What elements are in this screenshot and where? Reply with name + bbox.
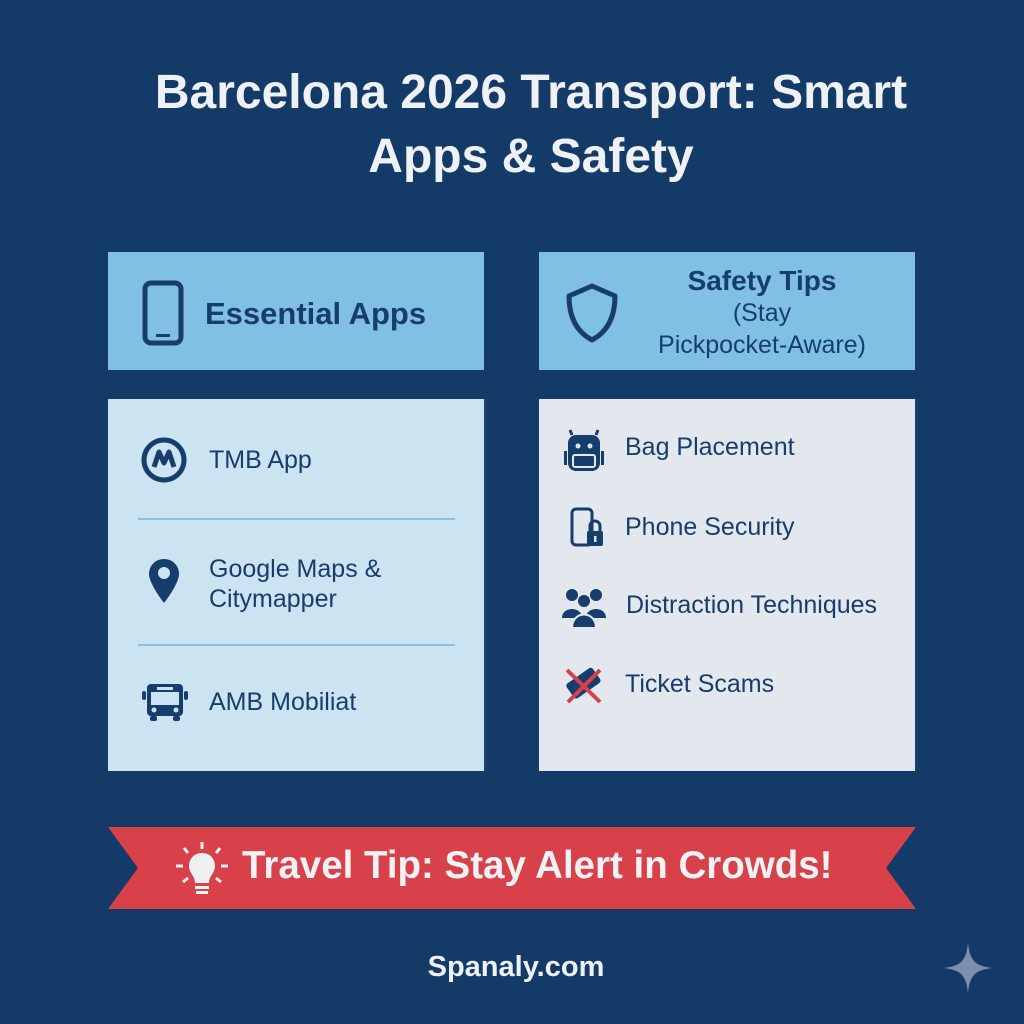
icon: phone lock bbox=[570, 508, 603, 546]
icon: bus bbox=[142, 684, 188, 721]
panel: safety list: Phone Security bbox=[625, 513, 795, 541]
icon: phone bbox=[142, 280, 184, 346]
panel: apps list: TMB App bbox=[209, 446, 312, 474]
header: essential apps: Essential Apps bbox=[205, 296, 426, 331]
banner: travel tip bbox=[108, 827, 916, 909]
title: Barcelona 2026 Transport: Smart bbox=[155, 66, 907, 119]
panel: apps list: Citymapper bbox=[209, 585, 337, 613]
icon: group bbox=[562, 589, 606, 627]
panel: safety list: Distraction Techniques bbox=[626, 591, 877, 619]
icon: lightbulb bbox=[176, 842, 228, 894]
panel: apps list: Google Maps & bbox=[209, 555, 381, 583]
title bbox=[155, 66, 907, 183]
title: Apps & Safety bbox=[368, 130, 694, 183]
icon: sparkle bbox=[944, 944, 992, 992]
header: safety tips: Safety Tips bbox=[688, 265, 836, 296]
banner: travel tip: Travel Tip: Stay Alert in Crowds! bbox=[242, 844, 832, 887]
panel: apps list bbox=[108, 399, 487, 771]
icon: metro bbox=[142, 438, 186, 482]
footer: Spanaly.com bbox=[428, 951, 604, 983]
header: safety tips bbox=[539, 252, 915, 370]
header: essential apps bbox=[108, 252, 484, 370]
panel: apps list: AMB Mobiliat bbox=[209, 688, 356, 716]
icon: shield bbox=[566, 284, 618, 342]
icon: ticket crossed bbox=[566, 668, 602, 704]
panel: safety list: Bag Placement bbox=[625, 433, 795, 461]
panel: safety list: Ticket Scams bbox=[625, 670, 774, 698]
icon: backpack bbox=[564, 430, 604, 471]
panel: safety list bbox=[539, 399, 918, 771]
header: safety tips: (Stay bbox=[733, 299, 791, 327]
header: safety tips: Pickpocket-Aware) bbox=[658, 331, 866, 359]
icon: map pin bbox=[149, 559, 179, 603]
